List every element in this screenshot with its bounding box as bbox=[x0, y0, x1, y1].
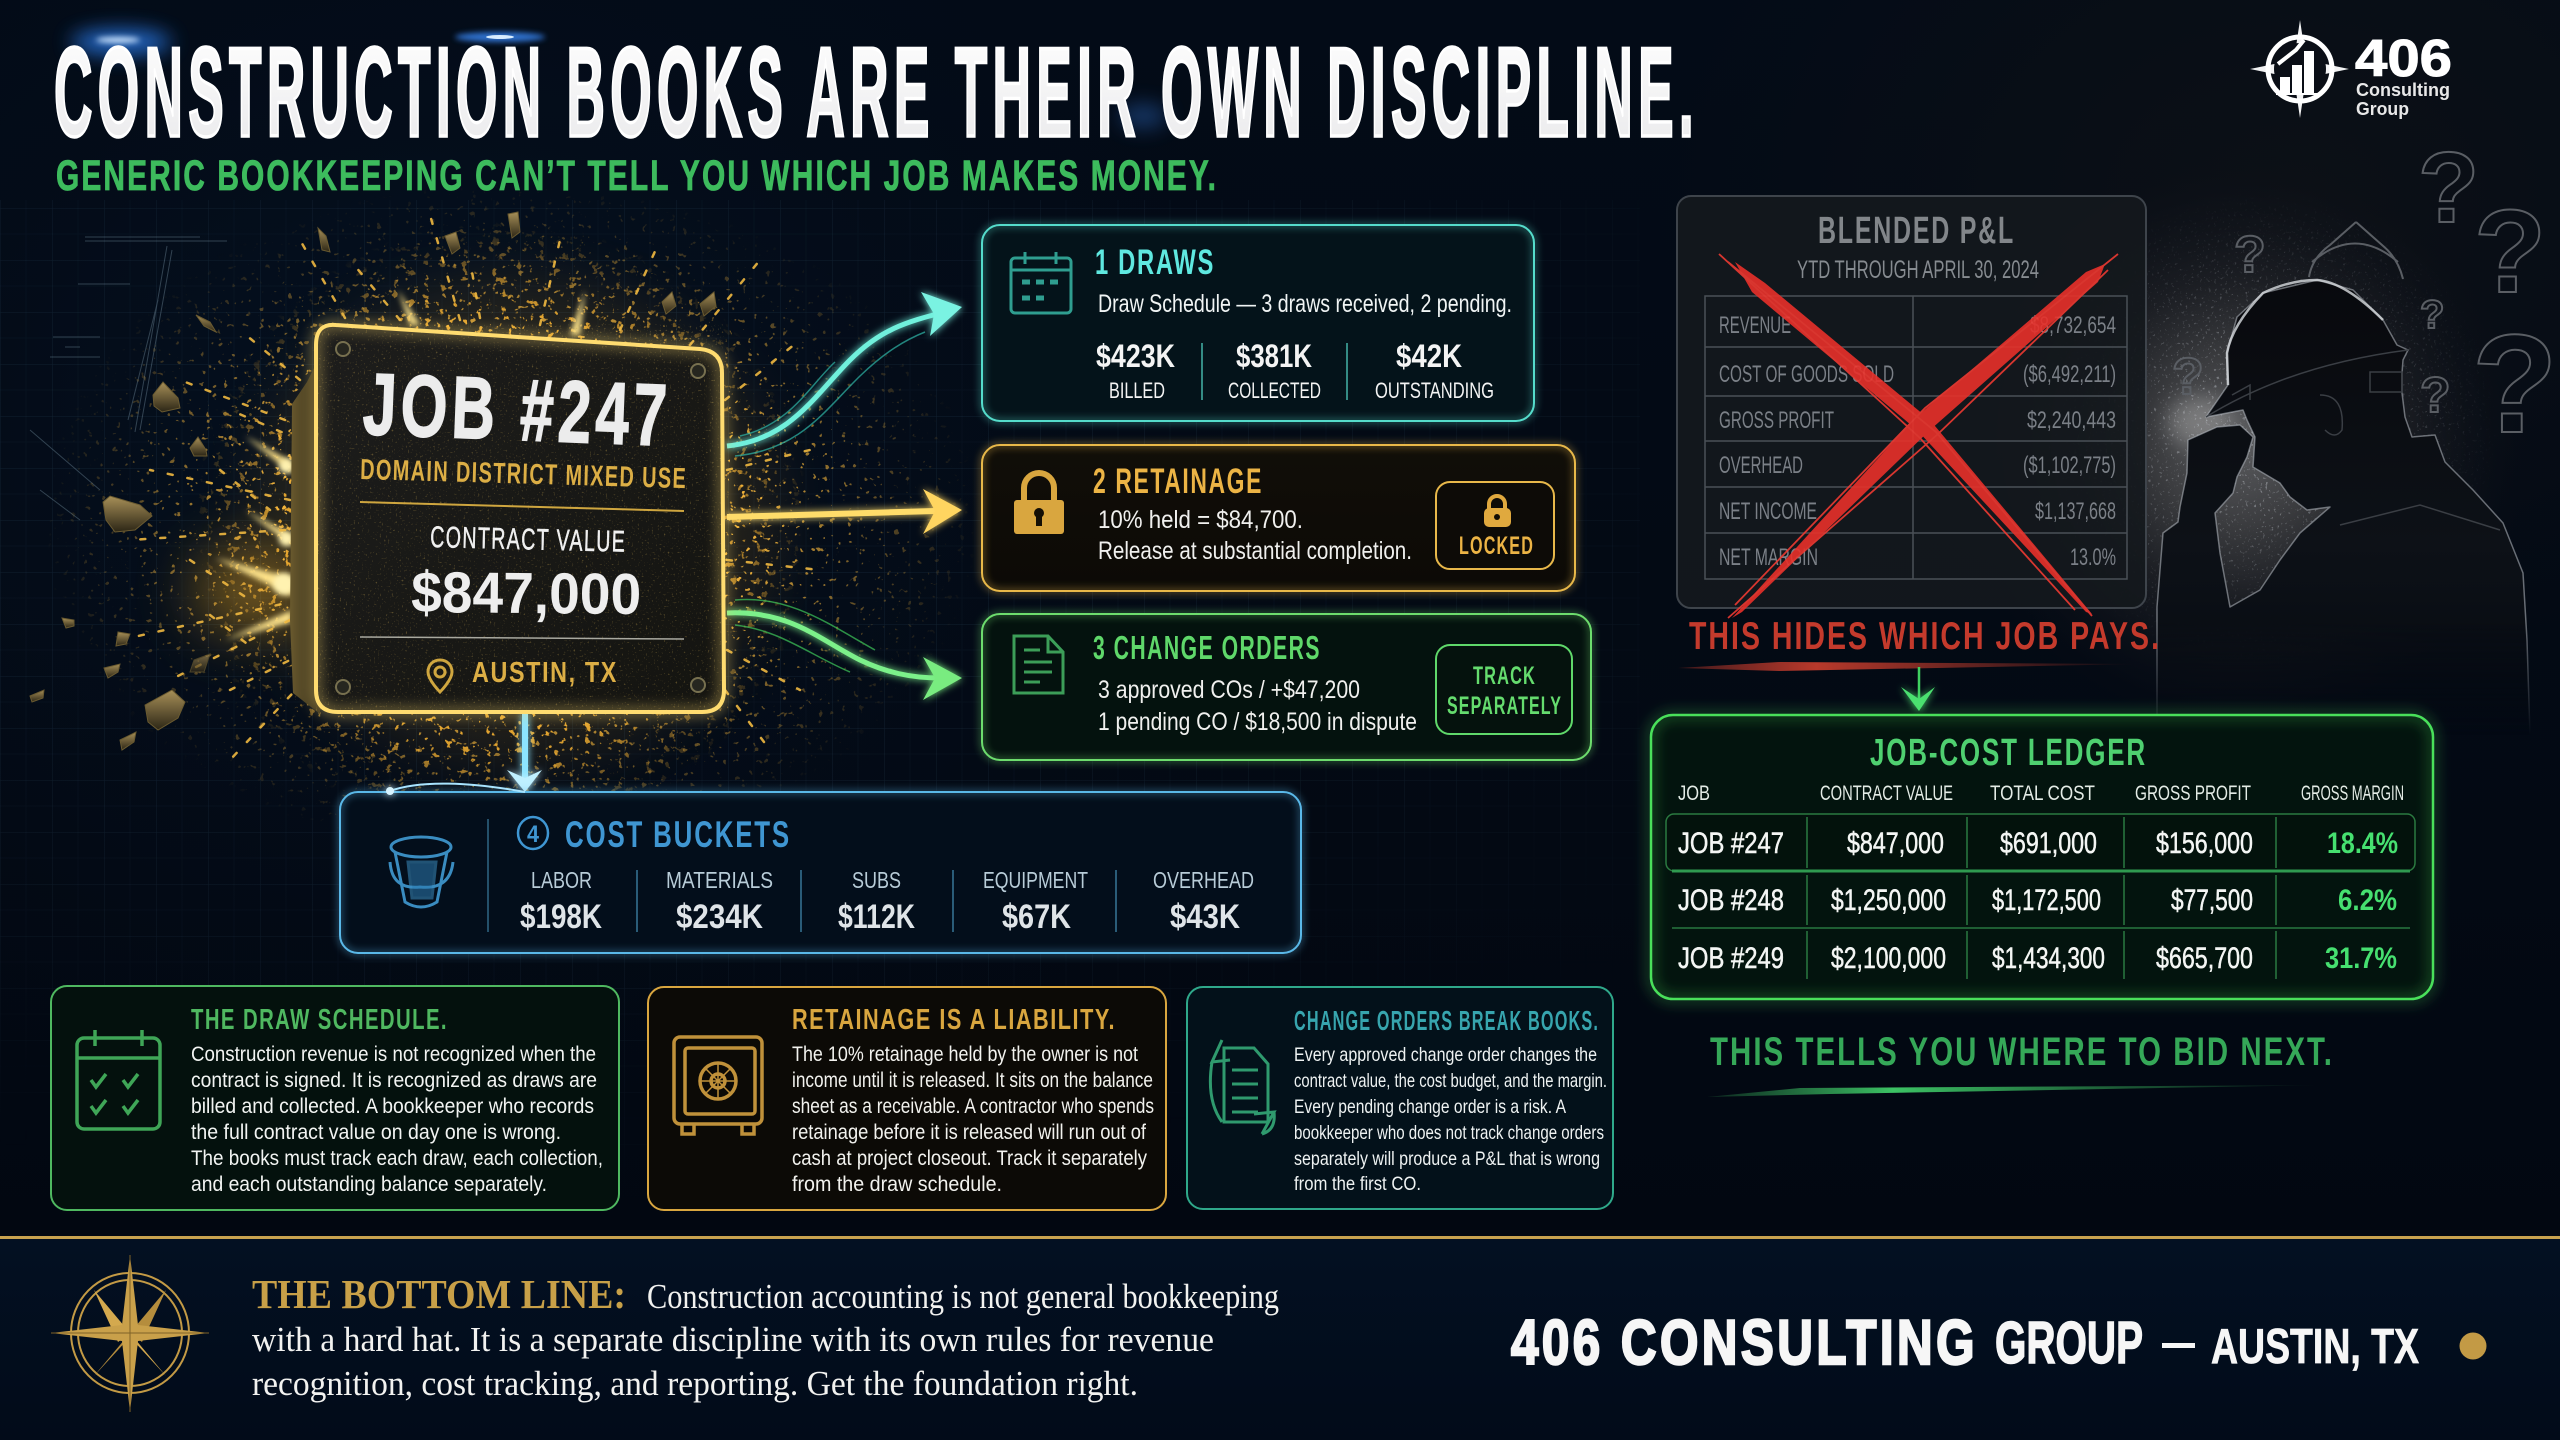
question marks: ? bbox=[2474, 186, 2546, 318]
ledger row: job 247 bbox=[1678, 827, 2398, 860]
stat: collected: COLLECTED bbox=[1228, 378, 1321, 403]
text block: Every approved change order changes the bbox=[1294, 1044, 1597, 1066]
company name: GROUP bbox=[1995, 1310, 2143, 1376]
caption: this tells you where to bid next: THIS TELLS YOU WHERE TO BID NEXT. bbox=[1710, 1030, 2334, 1074]
P&L table: $8,732,654 bbox=[2030, 312, 2116, 339]
bottom line text: THE BOTTOM LINE: bbox=[252, 1271, 626, 1317]
P&L table bbox=[1705, 296, 2127, 579]
text block: The books must track each draw, each collection, bbox=[191, 1147, 603, 1170]
panel: blended P&L: BLENDED P&L bbox=[1818, 210, 2015, 252]
bottom line text bbox=[252, 1271, 1279, 1403]
gold dot bbox=[2460, 1332, 2486, 1360]
arrow: to change orders bbox=[727, 599, 962, 700]
icon: padlock bbox=[1014, 473, 1064, 534]
ledger row: job 249: $665,700 bbox=[2156, 942, 2253, 975]
bucket: labor bbox=[520, 867, 602, 936]
contract value: $847,000 bbox=[411, 560, 641, 627]
text block bbox=[1294, 1044, 1607, 1195]
locked badge bbox=[1436, 482, 1554, 569]
panel: draws: 1 DRAWS bbox=[1095, 243, 1215, 282]
bucket: subs: SUBS bbox=[852, 867, 901, 893]
icon: calendar with checks bbox=[77, 1030, 160, 1129]
text block: and each outstanding balance separately. bbox=[191, 1173, 547, 1196]
panel: draws bbox=[982, 225, 1534, 421]
panel: cost buckets: 4 bbox=[527, 821, 540, 848]
panel: retainage: 10% held = $84,700. bbox=[1098, 506, 1303, 534]
icon: gold compass rose bbox=[51, 1255, 209, 1412]
P&L table: ($1,102,775) bbox=[2023, 452, 2116, 479]
text block: retainage before it is released will run out of bbox=[792, 1121, 1146, 1144]
P&L table: COST OF GOODS SOLD bbox=[1719, 361, 1894, 388]
stat: collected: $381K bbox=[1236, 338, 1312, 374]
bottom line text: with a hard hat. It is a separate discipline with its own rules for revenue bbox=[252, 1320, 1214, 1359]
ledger row: job 247: JOB #247 bbox=[1678, 827, 1784, 860]
question marks: ? bbox=[2472, 305, 2558, 462]
arrow: to retainage bbox=[727, 489, 962, 534]
text block: cash at project closeout. Track it separately bbox=[792, 1147, 1147, 1170]
ledger column headers: GROSS PROFIT bbox=[2135, 782, 2251, 805]
track separately badge: TRACK bbox=[1473, 662, 1536, 690]
question marks: ? bbox=[2418, 132, 2479, 244]
logo: 406 Consulting Group: Consulting bbox=[2356, 80, 2450, 100]
track separately badge bbox=[1436, 645, 1572, 734]
ledger row: job 249: $2,100,000 bbox=[1831, 942, 1946, 975]
panel: retainage: Release at substantial completion. bbox=[1098, 537, 1412, 565]
title bbox=[54, 21, 1699, 163]
text block: from the first CO. bbox=[1294, 1173, 1421, 1195]
text block: bookkeeper who does not track change orders bbox=[1294, 1122, 1604, 1144]
bucket: labor: $198K bbox=[520, 898, 602, 936]
bucket: materials: $234K bbox=[676, 898, 763, 936]
panel: change orders bbox=[982, 614, 1591, 760]
text block: Construction revenue is not recognized when the bbox=[191, 1043, 596, 1066]
panel: draws: Draw Schedule — 3 draws received, 2 pending. bbox=[1098, 290, 1512, 318]
bucket: subs: $112K bbox=[838, 898, 915, 936]
company name: 406 CONSULTING bbox=[1511, 1308, 1978, 1378]
question marks: ? bbox=[2420, 293, 2444, 337]
explosion of sparks behind the job plaque bbox=[30, 191, 968, 820]
bucket: overhead: OVERHEAD bbox=[1153, 867, 1254, 893]
stat: collected bbox=[1228, 338, 1321, 403]
panel: change orders break books bbox=[1187, 987, 1613, 1209]
text block: from the draw schedule. bbox=[792, 1173, 1002, 1196]
panel: the draw schedule: THE DRAW SCHEDULE. bbox=[191, 1004, 448, 1036]
bucket: equipment bbox=[983, 867, 1088, 936]
ledger row: job 249: JOB #249 bbox=[1678, 942, 1784, 975]
text block: Every pending change order is a risk. A bbox=[1294, 1096, 1566, 1118]
text block: separately will produce a P&L that is wrong bbox=[1294, 1148, 1600, 1170]
bucket: equipment: $67K bbox=[1002, 898, 1071, 936]
contract value label: CONTRACT VALUE bbox=[430, 521, 627, 559]
background bbox=[0, 96, 2433, 1118]
panel: change orders: 3 approved COs / +$47,200 bbox=[1098, 676, 1360, 704]
bucket: overhead: $43K bbox=[1170, 898, 1240, 936]
ledger row: job 247: $691,000 bbox=[2000, 827, 2097, 860]
ledger row: job 249: 31.7% bbox=[2325, 942, 2397, 975]
text block: billed and collected. A bookkeeper who records bbox=[191, 1095, 594, 1118]
text block bbox=[792, 1043, 1154, 1196]
track separately badge: SEPARATELY bbox=[1447, 692, 1562, 720]
P&L table: $2,240,443 bbox=[2027, 407, 2116, 434]
caption: this tells you where to bid next bbox=[1707, 1030, 2334, 1097]
icon: calendar bbox=[1011, 252, 1071, 313]
panel: cost buckets: COST BUCKETS bbox=[565, 814, 791, 855]
ledger row: job 247: 18.4% bbox=[2327, 827, 2398, 860]
ledger row: job 248: 6.2% bbox=[2338, 884, 2397, 917]
ledger row: job 247: $847,000 bbox=[1847, 827, 1944, 860]
question marks bbox=[2172, 132, 2558, 462]
bottom line text: Construction accounting is not general bookkeeping bbox=[647, 1277, 1279, 1316]
panel: change orders break books: CHANGE ORDERS BREAK BOOKS. bbox=[1294, 1005, 1599, 1036]
bucket: labor: LABOR bbox=[531, 867, 592, 893]
ledger column headers: TOTAL COST bbox=[1990, 782, 2095, 805]
panel: change orders: 1 pending CO / $18,500 in dispute bbox=[1098, 708, 1417, 736]
P&L table: GROSS PROFIT bbox=[1719, 407, 1834, 434]
ledger row: job 247: $156,000 bbox=[2156, 827, 2253, 860]
stat: outstanding: $42K bbox=[1396, 338, 1462, 374]
arrow: P&L to ledger bbox=[1901, 667, 1935, 711]
panel: retainage is a liability: RETAINAGE IS A LIABILITY. bbox=[792, 1004, 1116, 1036]
icon: document bbox=[1014, 636, 1063, 693]
ledger row: job 248: $77,500 bbox=[2171, 884, 2253, 917]
plaque heading: JOB #247 bbox=[361, 354, 673, 465]
bucket: subs bbox=[838, 867, 915, 936]
icon: location pin bbox=[428, 660, 452, 692]
text block: contract value, the cost budget, and the margin. bbox=[1294, 1070, 1607, 1092]
question marks: ? bbox=[2420, 367, 2451, 423]
text block: contract is signed. It is recognized as draws are bbox=[191, 1069, 597, 1092]
stat: outstanding bbox=[1375, 338, 1494, 403]
ledger row: job 248: JOB #248 bbox=[1678, 884, 1784, 917]
caption: this hides which job pays: THIS HIDES WHICH JOB PAYS. bbox=[1689, 615, 2161, 658]
caption: this hides which job pays bbox=[1678, 615, 2161, 671]
text block bbox=[191, 1043, 603, 1196]
P&L table: 13.0% bbox=[2070, 544, 2116, 571]
locked badge: LOCKED bbox=[1459, 532, 1534, 560]
bucket: materials bbox=[666, 867, 773, 936]
panel: job-cost ledger bbox=[1651, 715, 2433, 999]
worker silhouette with question marks bbox=[2100, 150, 2550, 725]
ledger row: job 248 bbox=[1678, 884, 2397, 917]
stat: outstanding: OUTSTANDING bbox=[1375, 378, 1494, 403]
ledger row: job 248: $1,250,000 bbox=[1831, 884, 1946, 917]
P&L table: $1,137,668 bbox=[2035, 498, 2116, 525]
footer band bbox=[0, 1236, 2560, 1440]
ledger column headers: CONTRACT VALUE bbox=[1820, 782, 1953, 805]
company name: AUSTIN, TX bbox=[2211, 1320, 2419, 1374]
arrow: to cost buckets bbox=[507, 713, 542, 792]
logo: 406 Consulting Group bbox=[2250, 20, 2452, 119]
panel: retainage bbox=[982, 445, 1575, 591]
stat: billed bbox=[1096, 338, 1175, 403]
P&L table: ($6,492,211) bbox=[2023, 361, 2116, 388]
stat: billed: BILLED bbox=[1109, 378, 1165, 403]
logo: 406 Consulting Group: Group bbox=[2356, 99, 2409, 119]
P&L table: REVENUE bbox=[1719, 312, 1791, 339]
ledger row: job 249 bbox=[1678, 942, 2397, 975]
text block: sheet as a receivable. A contractor who spends bbox=[792, 1095, 1154, 1118]
logo: 406 Consulting Group: 406 bbox=[2355, 30, 2452, 88]
ledger column headers bbox=[1678, 782, 2404, 805]
panel: blended P&L bbox=[1677, 196, 2146, 608]
ledger column headers: JOB bbox=[1678, 782, 1710, 805]
bucket: overhead bbox=[1153, 867, 1254, 936]
plaque project name: DOMAIN DISTRICT MIXED USE bbox=[360, 454, 688, 495]
text block: the full contract value on day one is wrong. bbox=[191, 1121, 561, 1144]
stat: billed: $423K bbox=[1096, 338, 1175, 374]
question marks: ? bbox=[2172, 348, 2204, 406]
panel: blended P&L: YTD THROUGH APRIL 30, 2024 bbox=[1797, 256, 2039, 284]
panel: cost buckets bbox=[340, 784, 1301, 953]
icon: safe bbox=[674, 1037, 762, 1134]
icon: bucket bbox=[390, 837, 453, 907]
ledger row: job 248: $1,172,500 bbox=[1992, 884, 2101, 917]
bucket: materials: MATERIALS bbox=[666, 867, 773, 893]
ledger row: job 249: $1,434,300 bbox=[1992, 942, 2105, 975]
arrow: to draws bbox=[727, 292, 962, 456]
job plaque bbox=[290, 325, 724, 714]
P&L table: NET MARGIN bbox=[1719, 544, 1818, 571]
P&L table: OVERHEAD bbox=[1719, 452, 1803, 479]
bucket: equipment: EQUIPMENT bbox=[983, 867, 1088, 893]
question marks: ? bbox=[2234, 226, 2266, 284]
text block: The 10% retainage held by the owner is not bbox=[792, 1043, 1138, 1066]
P&L table: NET INCOME bbox=[1719, 498, 1817, 525]
company name bbox=[1511, 1308, 2419, 1378]
panel: change orders: 3 CHANGE ORDERS bbox=[1093, 629, 1321, 666]
panel: retainage is a liability bbox=[648, 987, 1166, 1210]
bottom line text: recognition, cost tracking, and reporting. Get the foundation right. bbox=[252, 1364, 1138, 1403]
subtitle: GENERIC BOOKKEEPING CAN’T TELL YOU WHICH JOB MAKES MONEY. bbox=[56, 152, 1218, 200]
text block: income until it is released. It sits on the balance bbox=[792, 1069, 1153, 1092]
plaque location: AUSTIN, TX bbox=[472, 657, 618, 689]
ledger column headers: GROSS MARGIN bbox=[2301, 782, 2404, 805]
panel: retainage: 2 RETAINAGE bbox=[1093, 462, 1263, 501]
icon: document with cycle arrows bbox=[1210, 1040, 1274, 1134]
panel: the draw schedule bbox=[51, 986, 619, 1210]
red X across the P&L bbox=[1719, 254, 2118, 618]
panel: job-cost ledger: JOB-COST LEDGER bbox=[1870, 732, 2147, 774]
